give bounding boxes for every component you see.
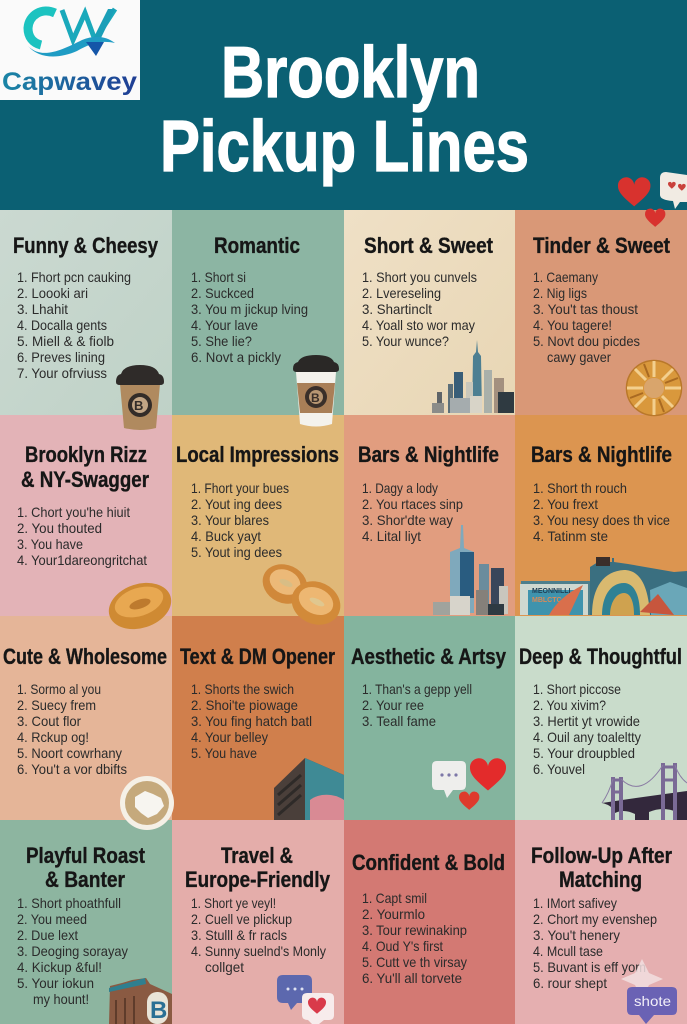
list: Bars & Nightlife: 4. Tatinm ste — [533, 528, 608, 544]
list: Romantic: 5. She lie? — [191, 333, 252, 349]
list: Follow-Up After Matching: 2. Chort my evenshep — [533, 911, 657, 927]
list: Romantic — [191, 269, 308, 365]
list: Romantic: 1. Short si — [191, 269, 246, 285]
icon: mural buildings — [520, 557, 687, 615]
list: Bars & Nightlife: 1. Dagy a lody — [362, 480, 438, 496]
list: Short & Sweet: 4. Yoall sto wor may — [362, 317, 475, 333]
list: Cute & Wholesome: 2. Suecy frem — [17, 697, 96, 713]
heading: Playful Roast & Banter — [26, 843, 146, 892]
list: Confident & Bold: 1. Capt smil — [362, 890, 427, 906]
list: Local Impressions: 2. Yout ing dees — [191, 496, 282, 512]
panel: Deep & Thoughtful — [515, 616, 687, 820]
icon: mural building — [274, 758, 344, 820]
list: Funny & Cheesy: 2. Loooki ari — [17, 285, 88, 301]
list: Brooklyn Rizz: 3. You have — [17, 536, 83, 552]
list: Confident & Bold: 4. Oud Y's first — [362, 938, 443, 954]
list: Tinder & Sweet: 1. Caemany — [533, 269, 598, 285]
list: Text & DM Opener: 1. Shorts the swich — [191, 681, 294, 697]
title: Brooklyn — [221, 33, 480, 113]
heading: Follow-Up After Matching: Matching — [559, 867, 642, 892]
list: Local Impressions — [191, 480, 289, 560]
logo: Capwavey — [0, 0, 140, 100]
panel: Playful Roast & Banter — [0, 820, 172, 1024]
heading: Short & Sweet: Short & Sweet — [364, 233, 494, 258]
list: Romantic: 3. You m jickup lving — [191, 301, 308, 317]
list: Bars & Nightlife: 1. Short th rouch — [533, 480, 627, 496]
list: Travel & Europe-Friendly: 3. Stulll & fr racls — [191, 927, 287, 943]
list: Aesthetic & Artsy: 3. Teall fame — [362, 713, 436, 729]
list: Playful Roast & Banter: 2. Due lext — [17, 927, 78, 943]
list: Tinder & Sweet: cawy gaver — [547, 349, 611, 365]
heading: Travel & Europe-Friendly — [185, 843, 331, 892]
list: Playful Roast & Banter — [17, 895, 128, 1007]
icon: mural buildings: MEONNILLI — [532, 588, 571, 595]
icon: bowl — [120, 776, 174, 830]
list: Follow-Up After Matching: 5. Buvant is eff yom — [533, 959, 646, 975]
heading: Confident & Bold: Confident & Bold — [352, 850, 505, 875]
list: Short & Sweet: 3. Shartinclt — [362, 301, 432, 317]
list: Short & Sweet: 2. Lvereseling — [362, 285, 441, 301]
list: Deep & Thoughtful: 3. Hertit yt vrowide — [533, 713, 640, 729]
list: Funny & Cheesy: 7. Your ofrviuss — [17, 365, 107, 381]
list: Bars & Nightlife: 3. You nesy does th vice — [533, 512, 670, 528]
list: Deep & Thoughtful: 2. You xivim? — [533, 697, 606, 713]
icon: two bagels — [256, 557, 348, 633]
list: Travel & Europe-Friendly: 1. Short ye veyl! — [191, 895, 276, 911]
header banner — [0, 0, 687, 210]
panel: Travel & Europe-Friendly — [172, 820, 344, 1024]
list: Deep & Thoughtful: 6. Youvel — [533, 761, 585, 777]
list: Playful Roast & Banter: my hount! — [33, 991, 89, 1007]
list: Text & DM Opener: 3. You fing hatch batl — [191, 713, 312, 729]
icon: coffee cup 2 — [293, 355, 339, 426]
list: Playful Roast & Banter: 5. Your iokun — [17, 975, 94, 991]
list: Funny & Cheesy: 5. Miell & & fiolb — [17, 333, 114, 349]
list: Short & Sweet: 5. Your wunce? — [362, 333, 449, 349]
list: Confident & Bold: 5. Cutt ve th virsay — [362, 954, 467, 970]
heading: Follow-Up After Matching — [531, 843, 672, 892]
title: Pickup Lines — [160, 107, 529, 187]
icon: skyline top — [432, 340, 514, 413]
icon: bridge — [602, 763, 687, 820]
list: Bars & Nightlife: 2. You frext — [533, 496, 598, 512]
list: Romantic: 4. Your lave — [191, 317, 258, 333]
heading: Brooklyn Rizz & NY-Swagger — [21, 442, 149, 492]
list: Deep & Thoughtful: 5. Your droupbled — [533, 745, 635, 761]
list: Playful Roast & Banter: 2. You meed — [17, 911, 87, 927]
list: Brooklyn Rizz: 1. Chort you'he hiuit — [17, 504, 130, 520]
logo: Capwavey: Capwavey — [2, 68, 137, 96]
icon: coffee cup 1: B — [134, 398, 143, 413]
list: Cute & Wholesome: 6. You't a vor dbifts — [17, 761, 127, 777]
panel: Follow-Up After Matching — [515, 820, 687, 1024]
list: Aesthetic & Artsy — [362, 681, 472, 729]
list: Bars & Nightlife: 2. You rtaces sinp — [362, 496, 463, 512]
list: Funny & Cheesy: 3. Lhahit — [17, 301, 68, 317]
list: Bars & Nightlife: 4. Lital liyt — [362, 528, 421, 544]
icon: mural buildings: MBLCTC — [532, 597, 562, 604]
list: Local Impressions: 1. Fhort your bues — [191, 480, 289, 496]
heading: Travel & Europe-Friendly: Europe-Friendly — [185, 867, 331, 892]
list: Funny & Cheesy: 6. Preves lining — [17, 349, 105, 365]
list: Funny & Cheesy — [17, 269, 131, 381]
list: Travel & Europe-Friendly: 4. Sunny suelnd's Monly — [191, 943, 326, 959]
icon: shote chat bubble — [627, 987, 677, 1024]
list: Bars & Nightlife: 3. Shor'dte way — [362, 512, 453, 528]
list: Brooklyn Rizz: 4. Your1dareongritchat — [17, 552, 147, 568]
icon: chat bubble and hearts — [432, 758, 506, 810]
panel: Bars & Nightlife (right) — [515, 415, 687, 616]
icon: skyline bottom — [433, 525, 508, 615]
list: Confident & Bold: 2. Yourmlo — [362, 906, 425, 922]
heading: Playful Roast & Banter: & Banter — [45, 867, 125, 892]
list: Follow-Up After Matching: 1. IMort safivey — [533, 895, 617, 911]
panel: Bars & Nightlife (left) — [344, 415, 515, 616]
list: Follow-Up After Matching — [533, 895, 657, 991]
panel: Confident & Bold — [344, 820, 515, 1024]
list: Text & DM Opener: 4. Your belley — [191, 729, 268, 745]
list: Text & DM Opener — [191, 681, 312, 761]
panel: Tinder & Sweet — [515, 210, 687, 415]
panel: Local Impressions — [172, 415, 344, 616]
list: Confident & Bold: 3. Tour rewinakinp — [362, 922, 467, 938]
list: Follow-Up After Matching: 6. rour shept — [533, 975, 607, 991]
list: Short & Sweet: 1. Short you cunvels — [362, 269, 477, 285]
panel: Romantic — [172, 210, 344, 415]
list: Travel & Europe-Friendly: collget — [205, 959, 244, 975]
list: Playful Roast & Banter: 4. Kickup &ful! — [17, 959, 102, 975]
list: Bars & Nightlife — [533, 480, 670, 544]
list: Follow-Up After Matching: 4. Mcull tase — [533, 943, 603, 959]
list: Brooklyn Rizz: 2. You thouted — [17, 520, 102, 536]
list: Tinder & Sweet: 2. Nig ligs — [533, 285, 587, 301]
icon: brick building: B — [150, 997, 167, 1024]
panel: Brooklyn Rizz — [0, 415, 172, 616]
icon: chat bubbles with heart — [277, 975, 334, 1024]
panel: Text & DM Opener — [172, 616, 344, 820]
panel: Aesthetic & Artsy — [344, 616, 515, 820]
list: Confident & Bold — [362, 890, 467, 986]
heading: Romantic: Romantic — [214, 233, 300, 258]
list: Brooklyn Rizz — [17, 504, 147, 568]
list: Local Impressions: 3. Your blares — [191, 512, 269, 528]
list: Aesthetic & Artsy: 1. Than's a gepp yell — [362, 681, 472, 697]
icon: bagel — [103, 575, 177, 637]
list: Tinder & Sweet — [533, 269, 640, 365]
icon: sparkle — [621, 959, 663, 999]
list: Travel & Europe-Friendly: 2. Cuell ve plickup — [191, 911, 292, 927]
list: Playful Roast & Banter: 1. Short phoathfull — [17, 895, 121, 911]
heading: Funny & Cheesy: Funny & Cheesy — [13, 233, 159, 258]
list: Tinder & Sweet: 5. Novt dou picdes — [533, 333, 640, 349]
icon: coffee cup 2: B — [311, 391, 320, 405]
heading: Travel & Europe-Friendly: Travel & — [221, 843, 293, 868]
heading: Text & DM Opener: Text & DM Opener — [180, 644, 335, 669]
list: Romantic: 6. Novt a pickly — [191, 349, 281, 365]
list: Deep & Thoughtful: 4. Ouil any toaleltty — [533, 729, 641, 745]
heading: Local Impressions: Local Impressions — [176, 442, 339, 467]
panel: Funny & Cheesy — [0, 210, 172, 415]
list: Cute & Wholesome: 4. Rckup og! — [17, 729, 89, 745]
list: Confident & Bold: 6. Yu'll all torvete — [362, 970, 462, 986]
panel: Cute & Wholesome — [0, 616, 172, 820]
list: Text & DM Opener: 5. You have — [191, 745, 257, 761]
list: Aesthetic & Artsy: 2. Your ree — [362, 697, 424, 713]
heading: Brooklyn Rizz & NY-Swagger: & NY-Swagger — [21, 467, 149, 492]
heading: Aesthetic & Artsy: Aesthetic & Artsy — [351, 644, 507, 669]
list: Cute & Wholesome: 5. Noort cowrhany — [17, 745, 122, 761]
list: Text & DM Opener: 2. Shoi'te piowage — [191, 697, 298, 713]
list: Cute & Wholesome: 3. Cout flor — [17, 713, 81, 729]
icon: shote chat bubble: shote — [634, 993, 671, 1009]
heading: Cute & Wholesome: Cute & Wholesome — [3, 644, 167, 669]
title — [160, 33, 529, 187]
heading: Tinder & Sweet: Tinder & Sweet — [533, 233, 671, 258]
list: Short & Sweet — [362, 269, 477, 349]
list: Local Impressions: 4. Buck yayt — [191, 528, 261, 544]
list: Funny & Cheesy: 1. Fhort pcn cauking — [17, 269, 131, 285]
list: Playful Roast & Banter: 3. Deoging sorayay — [17, 943, 128, 959]
icon: header hearts and chat bubble — [618, 172, 687, 227]
list: Tinder & Sweet: 4. You tagere! — [533, 317, 612, 333]
list: Tinder & Sweet: 3. You't tas thoust — [533, 301, 638, 317]
icon: brick building — [109, 978, 172, 1024]
icon: croissant ring — [626, 360, 682, 416]
list: Deep & Thoughtful: 1. Short piccose — [533, 681, 621, 697]
list: Cute & Wholesome: 1. Sormo al you — [17, 681, 101, 697]
list: Romantic: 2. Suckced — [191, 285, 254, 301]
list: Follow-Up After Matching: 3. You't henery — [533, 927, 620, 943]
list: Bars & Nightlife — [362, 480, 463, 544]
list: Travel & Europe-Friendly — [191, 895, 326, 975]
heading: Playful Roast & Banter: Playful Roast — [26, 843, 146, 868]
list: Funny & Cheesy: 4. Docalla gents — [17, 317, 107, 333]
list: Local Impressions: 5. Yout ing dees — [191, 544, 282, 560]
list: Deep & Thoughtful — [533, 681, 641, 777]
icon: coffee cup 1 — [116, 365, 164, 430]
heading: Bars & Nightlife: Bars & Nightlife — [358, 442, 499, 467]
panel: Short & Sweet — [344, 210, 515, 415]
list: Cute & Wholesome — [17, 681, 127, 777]
heading: Brooklyn Rizz & NY-Swagger: Brooklyn Rizz — [25, 442, 147, 467]
